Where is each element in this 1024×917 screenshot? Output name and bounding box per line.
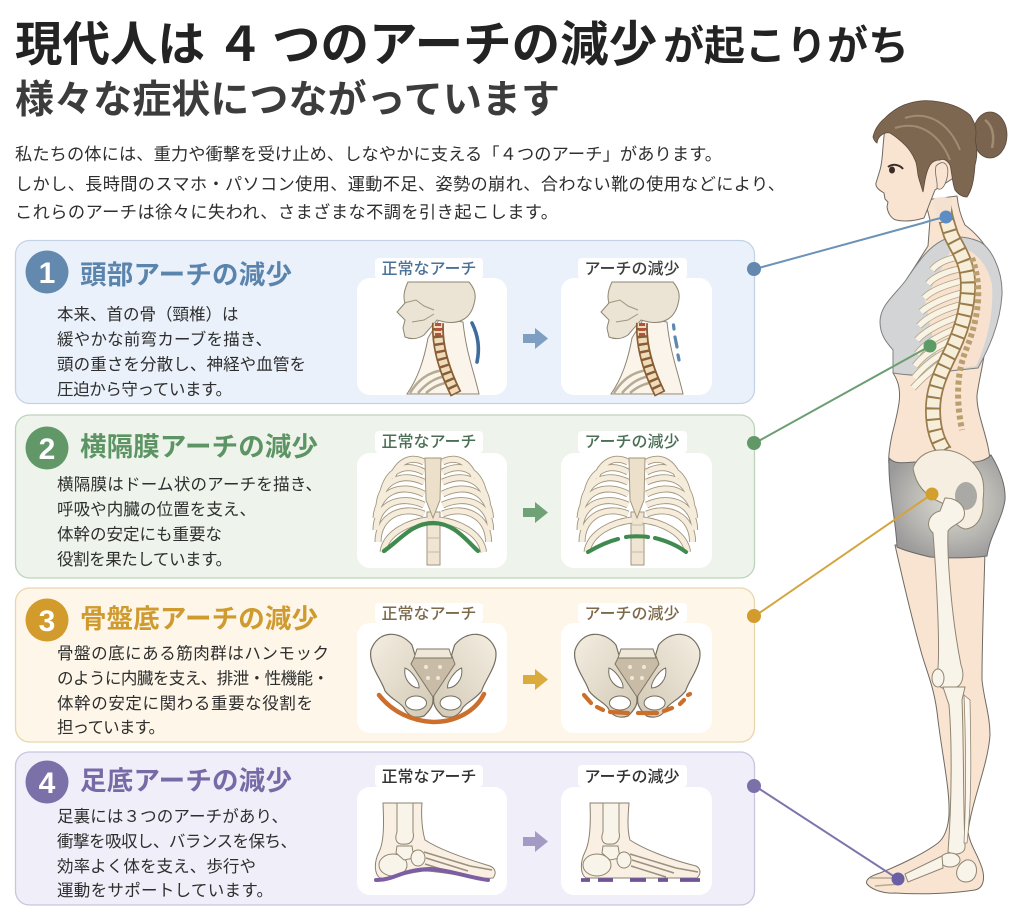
- title: つのアーチの減少: [272, 18, 657, 72]
- normal foot illustration: [357, 765, 507, 895]
- arrow 1: [523, 328, 548, 349]
- description 4: [57, 807, 297, 900]
- intro text: しかし、長時間のスマホ・パソコン使用、運動不足、姿勢の崩れ、合わない靴の使用などにより、: [15, 174, 785, 194]
- number badge 3: [26, 598, 68, 642]
- foot bones: [957, 860, 976, 882]
- number badge 4: [26, 760, 68, 804]
- description 1: 圧迫から守っています。: [57, 380, 232, 399]
- connector 4: foot: [747, 779, 904, 886]
- panel 1: cervical arch: [16, 240, 754, 404]
- number badge 2: [26, 426, 68, 470]
- connector 1: cervical: [747, 210, 952, 276]
- description 2: 呼吸や内臓の位置を支え、: [57, 500, 256, 519]
- shorts: [889, 455, 1005, 558]
- number badge 1: [26, 250, 68, 294]
- description 2: 体幹の安定にも重要な: [57, 525, 222, 544]
- arrow 4: [523, 831, 548, 852]
- subtitle: 様々な症状につながっています: [15, 79, 560, 122]
- number badge 2: 2: [39, 433, 55, 466]
- heading 1: 頭部アーチの減少: [80, 260, 292, 290]
- ear: [935, 163, 948, 189]
- description 2: [57, 475, 322, 569]
- description 1: 緩やかな前弯カーブを描き、: [57, 329, 272, 349]
- crop top: [880, 237, 1002, 375]
- description 3: 担っています。: [57, 718, 165, 737]
- ribs: [913, 256, 966, 388]
- intro text: 私たちの体には、重力や衝撃を受け止め、しなやかに支える「４つのアーチ」があります。: [15, 144, 722, 164]
- normal pelvis illustration: [357, 603, 507, 733]
- femur: [929, 498, 964, 689]
- normal diaphragm illustration: [357, 431, 507, 568]
- bun: [973, 112, 1007, 158]
- reduced foot illustration: [561, 765, 712, 895]
- reduced cervical illustration: アーチの減少: [584, 260, 680, 278]
- figure: standing woman with skeleton: [867, 101, 1007, 894]
- connector 3: pelvic floor: [747, 488, 938, 623]
- normal foot illustration: 正常なアーチ: [381, 768, 477, 786]
- number badge 3: 3: [39, 605, 55, 638]
- number badge 4: 4: [39, 767, 56, 800]
- description 4: 効率よく体を支え、歩行や: [57, 857, 256, 876]
- description 2: 横隔膜はドーム状のアーチを描き、: [57, 475, 322, 494]
- connector 2: diaphragm: [747, 340, 936, 450]
- reduced cervical illustration: [561, 258, 712, 395]
- description 3: [57, 644, 329, 737]
- heading 3: 骨盤底アーチの減少: [80, 604, 318, 634]
- description 1: 本来、首の骨（頸椎）は: [57, 305, 238, 324]
- panel 2: diaphragm arch: [16, 415, 754, 578]
- intro text: これらのアーチは徐々に失われ、さまざまな不調を引き起こします。: [15, 202, 558, 222]
- legs and torso skin: [867, 545, 990, 894]
- description 3: のように内臓を支え、排泄・性機能・: [57, 669, 329, 688]
- arrow 3: [523, 669, 548, 690]
- description 1: [57, 305, 306, 399]
- spine: [933, 200, 968, 452]
- description 2: 役割を果たしています。: [57, 550, 232, 569]
- description 3: 体幹の安定に関わる重要な役割を: [57, 694, 313, 713]
- reduced foot illustration: アーチの減少: [584, 768, 680, 786]
- hair: [873, 101, 977, 197]
- heading 2: 横隔膜アーチの減少: [80, 432, 318, 462]
- eye: [888, 165, 903, 169]
- pelvis: [913, 450, 984, 529]
- reduced pelvis illustration: アーチの減少: [584, 605, 680, 623]
- tibia and fibula: [943, 687, 965, 854]
- panel 3: pelvic floor arch: [16, 588, 754, 742]
- title: が起こりがち: [663, 23, 909, 69]
- title: [15, 18, 909, 72]
- heading 4: 足底アーチの減少: [80, 766, 292, 796]
- intro text: [15, 144, 785, 222]
- normal cervical illustration: 正常なアーチ: [381, 260, 477, 278]
- arrow 2: [523, 502, 548, 523]
- description 4: 衝撃を吸収し、バランスを保ち、: [57, 832, 297, 851]
- title: ４: [216, 19, 264, 72]
- number badge 1: 1: [39, 257, 55, 290]
- normal cervical illustration: [357, 258, 507, 395]
- description 4: 足裏には３つのアーチがあり、: [57, 807, 288, 826]
- description 3: 骨盤の底にある筋肉群はハンモック: [57, 644, 329, 663]
- panel 4: foot arch: [16, 752, 754, 905]
- normal diaphragm illustration: 正常なアーチ: [381, 433, 477, 451]
- neck and face: [876, 120, 958, 221]
- description 1: 頭の重さを分散し、神経や血管を: [57, 355, 306, 374]
- description 4: 運動をサポートしています。: [57, 881, 273, 900]
- normal pelvis illustration: 正常なアーチ: [381, 605, 477, 623]
- reduced diaphragm illustration: [561, 431, 712, 568]
- reduced diaphragm illustration: アーチの減少: [584, 433, 680, 451]
- reduced pelvis illustration: [561, 603, 712, 733]
- title: 現代人は: [15, 19, 205, 72]
